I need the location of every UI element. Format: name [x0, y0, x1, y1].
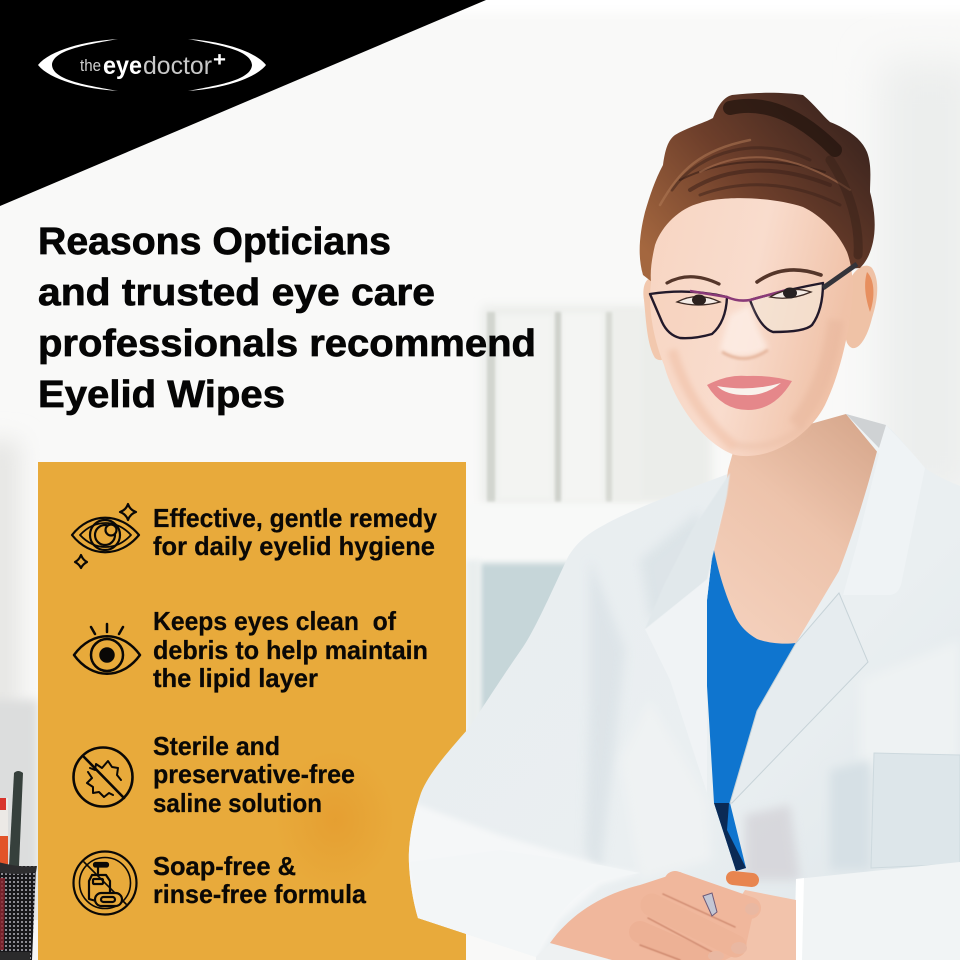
text: reason three: saline solution: [153, 788, 322, 818]
face shading: [672, 320, 836, 447]
logo wordmark: [80, 49, 226, 80]
icon: sparkling eye: [72, 504, 139, 568]
text: reason two: the lipid layer: [153, 663, 318, 693]
icon: open eye with rays: [74, 624, 140, 674]
pen: [703, 893, 717, 916]
text: reason one: for daily eyelid hygiene: [153, 531, 435, 561]
text: reason one: [153, 503, 438, 561]
text: reason two: [153, 606, 428, 693]
eyes: [677, 288, 811, 306]
right sleeve: [796, 862, 960, 960]
neck: [714, 414, 880, 644]
headline: Reasons Opticians: [38, 221, 391, 263]
hair strands: [660, 106, 858, 255]
doctor portrait illustration: [405, 93, 960, 960]
right lapel: [730, 593, 868, 803]
text: reason two: Keeps eyes clean of: [153, 606, 396, 636]
nose: [720, 305, 768, 359]
black corner banner: [0, 0, 486, 206]
left ear: [643, 278, 664, 360]
hair: [640, 93, 875, 282]
headline: [38, 221, 536, 416]
headline: Eyelid Wipes: [38, 374, 285, 416]
logo wordmark: doctor: [143, 52, 212, 80]
ear inner: [865, 272, 873, 312]
mouth: [707, 376, 792, 410]
text: reason four: rinse-free formula: [153, 879, 367, 909]
logo wordmark: eye: [103, 52, 142, 80]
face: [650, 198, 853, 456]
left cuff: [410, 850, 640, 957]
right eyebrow: [757, 270, 821, 282]
headline: and trusted eye care: [38, 272, 435, 314]
cuff edge: [794, 878, 804, 960]
text: reason three: Sterile and: [153, 731, 280, 761]
blue shirt: [707, 495, 796, 871]
ears: [846, 266, 877, 348]
eyebrows: [667, 277, 719, 284]
text: reason four: [153, 851, 367, 909]
hands: [550, 872, 796, 960]
logo wordmark: the: [80, 56, 101, 75]
glasses: [650, 264, 857, 338]
icon: no preservatives: [74, 748, 132, 806]
text: reason three: [153, 731, 355, 818]
logo: the eye doctor: [38, 39, 266, 91]
left lapel: [645, 495, 727, 793]
lab coat: [409, 414, 960, 960]
desk pen holder: [0, 771, 37, 960]
text: reason two: debris to help maintain: [153, 635, 428, 665]
paper: [536, 944, 610, 960]
right collar: [843, 414, 925, 595]
collar inner: [846, 414, 886, 448]
text: reason one: Effective, gentle remedy: [153, 503, 438, 533]
shirt lower shadow: [714, 803, 746, 871]
headline: professionals recommend: [38, 323, 536, 365]
left collar: [645, 473, 730, 629]
icon: no soap: [74, 852, 136, 914]
logo crescents: [38, 39, 266, 91]
panel: reasons: [38, 462, 466, 960]
logo wordmark: +: [213, 49, 226, 71]
text: reason three: preservative-free: [153, 759, 355, 789]
pocket: [871, 753, 960, 868]
text: reason four: Soap-free &: [153, 851, 296, 881]
coat shading: [405, 510, 960, 960]
